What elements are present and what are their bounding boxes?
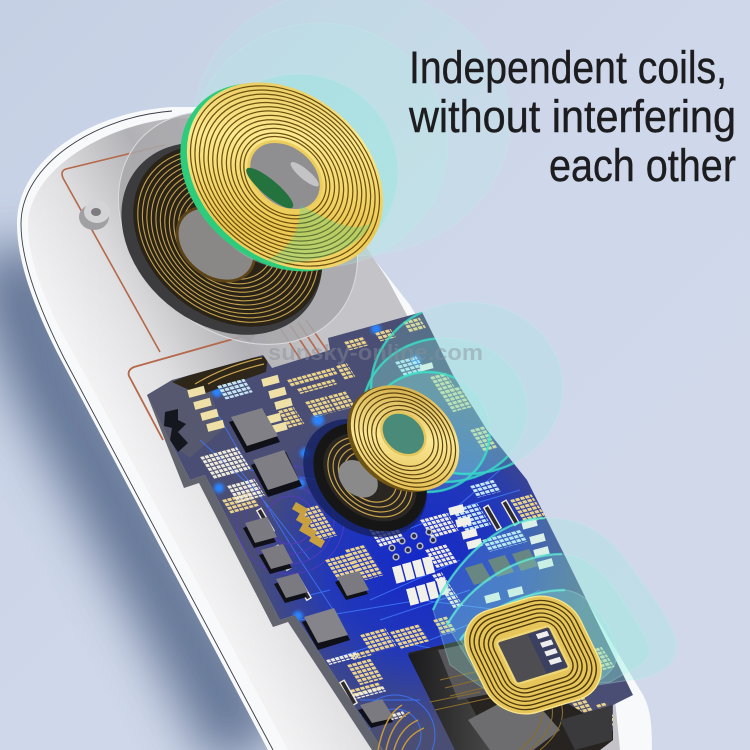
blue pads [217, 356, 528, 552]
square coil [452, 587, 614, 723]
blue glows [212, 324, 421, 621]
halo arcs over board [363, 302, 565, 640]
gold arc coil top left [172, 356, 268, 395]
screw boss [79, 201, 110, 230]
watermark: sunsky-online.com [268, 340, 483, 365]
gold pads [222, 318, 620, 727]
coil centre hole [235, 127, 335, 225]
mount bracket [195, 305, 258, 342]
gold pads near ring [292, 502, 325, 548]
board thickness [147, 395, 383, 750]
top coil [143, 41, 420, 313]
copper wires [62, 145, 328, 440]
green underside [143, 44, 415, 310]
vias [389, 529, 436, 560]
caps strip [257, 500, 519, 705]
device shadow [15, 250, 250, 750]
lower transformer block [408, 640, 620, 750]
connector [164, 409, 188, 452]
white resistors [392, 362, 554, 606]
grey solder area [147, 372, 222, 458]
gold coil bottom left [378, 705, 424, 750]
lower dark coil [83, 102, 361, 374]
white pads [200, 447, 464, 720]
heading [408, 42, 736, 191]
green tint over coil [262, 205, 372, 263]
device body [17, 107, 652, 750]
large pale pads [187, 375, 293, 434]
halos: top coil [192, 0, 510, 270]
glass disc under top coil [72, 64, 404, 392]
IC chips [229, 408, 538, 728]
halos: square coil [433, 518, 676, 700]
inner panel [28, 118, 620, 750]
device rim line [21, 111, 273, 750]
middle coil [325, 362, 480, 515]
circuit traces [200, 410, 540, 750]
printed circuit board [147, 312, 633, 750]
coil window [496, 626, 570, 684]
halos: middle coil [363, 302, 563, 492]
middle dark coil [280, 395, 451, 562]
